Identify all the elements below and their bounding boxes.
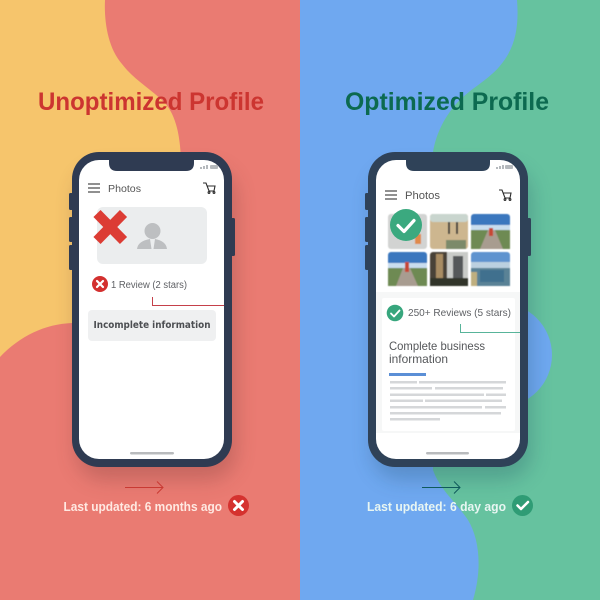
text: last updated 6 day ago: Last updated: 6 day ago: [367, 500, 506, 514]
icon: green check badge: [512, 495, 533, 516]
accent bar: [389, 373, 426, 376]
home indicator: [130, 452, 174, 454]
panel: incomplete information: [88, 310, 216, 341]
phone: optimized: [365, 152, 532, 480]
title: Unoptimized Profile: Unoptimized Profile: [38, 88, 264, 116]
text: complete business information: information: [389, 352, 448, 366]
menu icon: [88, 184, 100, 192]
icon: large green check badge: [390, 209, 422, 241]
arrow: right: [422, 482, 460, 494]
connector line: [460, 324, 520, 332]
connector line: [152, 297, 224, 306]
text: review count: 1 Review (2 stars): [111, 280, 187, 291]
photo 4: [388, 252, 427, 286]
heading: Photos: Photos: [405, 190, 441, 202]
photo 6: [471, 252, 510, 286]
panel: incomplete information: Incomplete information: [94, 320, 211, 331]
photo grid: [388, 214, 510, 286]
photo 3: [471, 214, 510, 249]
photo 1: [388, 214, 427, 249]
icon: small red X badge: [92, 276, 108, 292]
icon: small green check badge: [387, 305, 403, 321]
background: right panel: [300, 0, 600, 600]
photo 5: [430, 252, 468, 286]
status bar icons: [200, 165, 218, 169]
placeholder text lines: [390, 381, 506, 420]
icon: cart: [499, 190, 511, 200]
photo 2: [430, 214, 468, 249]
title: Optimized Profile: Optimized Profile: [345, 88, 549, 116]
arrow: left: [125, 482, 163, 494]
icon: red X badge: [228, 495, 249, 516]
text: last updated 6 months ago: Last updated: 6 months ago: [64, 500, 222, 514]
status bar icons: [496, 165, 513, 169]
background: left panel: [0, 0, 300, 600]
menu icon: [385, 191, 397, 199]
icon: large red X: [97, 214, 124, 240]
home indicator: [426, 452, 469, 454]
phone: unoptimized: [69, 152, 236, 480]
heading: Photos: Photos: [108, 183, 141, 195]
text: complete business information: Complete business: [389, 339, 485, 353]
photo placeholder: [97, 207, 207, 264]
icon: cart: [203, 183, 215, 193]
text: review count: 250+ Reviews (5 stars): [408, 307, 511, 319]
panel: business details card: [376, 292, 520, 433]
